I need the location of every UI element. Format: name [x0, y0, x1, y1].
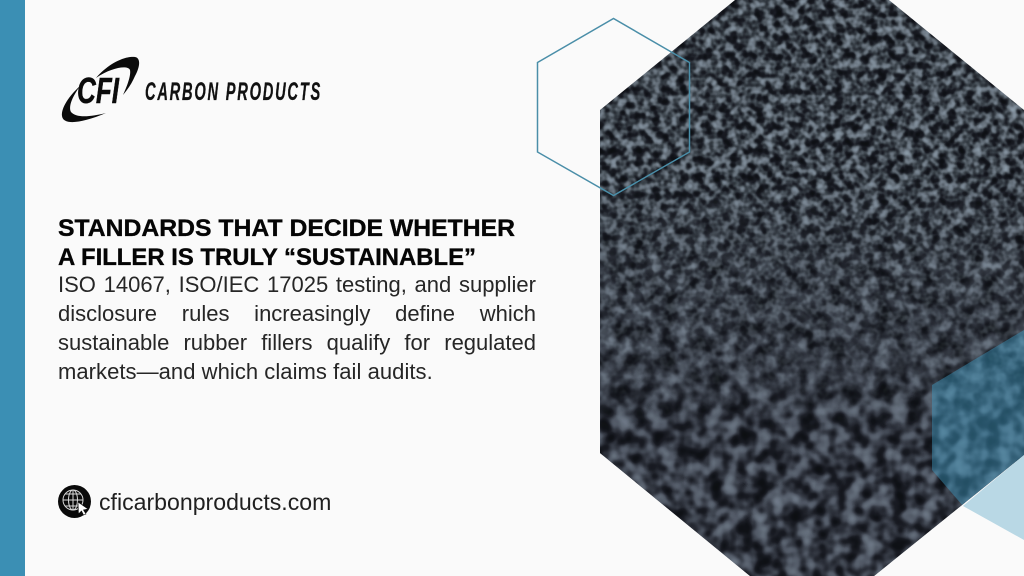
- body paragraph: sustainable rubber fillers qualify for regulated: [58, 330, 536, 355]
- body paragraph: ISO 14067, ISO/IEC 17025 testing, and supplier: [58, 272, 536, 297]
- body paragraph: markets—and which claims fail audits.: [58, 359, 433, 384]
- logo swoosh: [62, 57, 139, 122]
- heading: A FILLER IS TRULY “SUSTAINABLE”: [58, 244, 476, 271]
- heading: [58, 215, 515, 271]
- logo monogram: CFI: [77, 70, 120, 111]
- logo: CFI Carbon Products: [62, 57, 322, 122]
- logo wordmark: CARBON PRODUCTS: [145, 78, 322, 106]
- left accent bar: [0, 0, 25, 576]
- hexagon outline: [538, 18, 690, 196]
- hexagon photo: rubber filler pellets: [600, 0, 1024, 576]
- heading: STANDARDS THAT DECIDE WHETHER: [58, 215, 515, 242]
- pale blue hexagon corner: [963, 455, 1024, 540]
- icon: globe with cursor: [58, 485, 91, 518]
- website url: cficarbonproducts.com: [99, 489, 331, 515]
- body paragraph: [58, 272, 536, 384]
- light-blue hexagon overlay on photo: [932, 330, 1024, 505]
- body paragraph: disclosure rules increasingly define which: [58, 301, 536, 326]
